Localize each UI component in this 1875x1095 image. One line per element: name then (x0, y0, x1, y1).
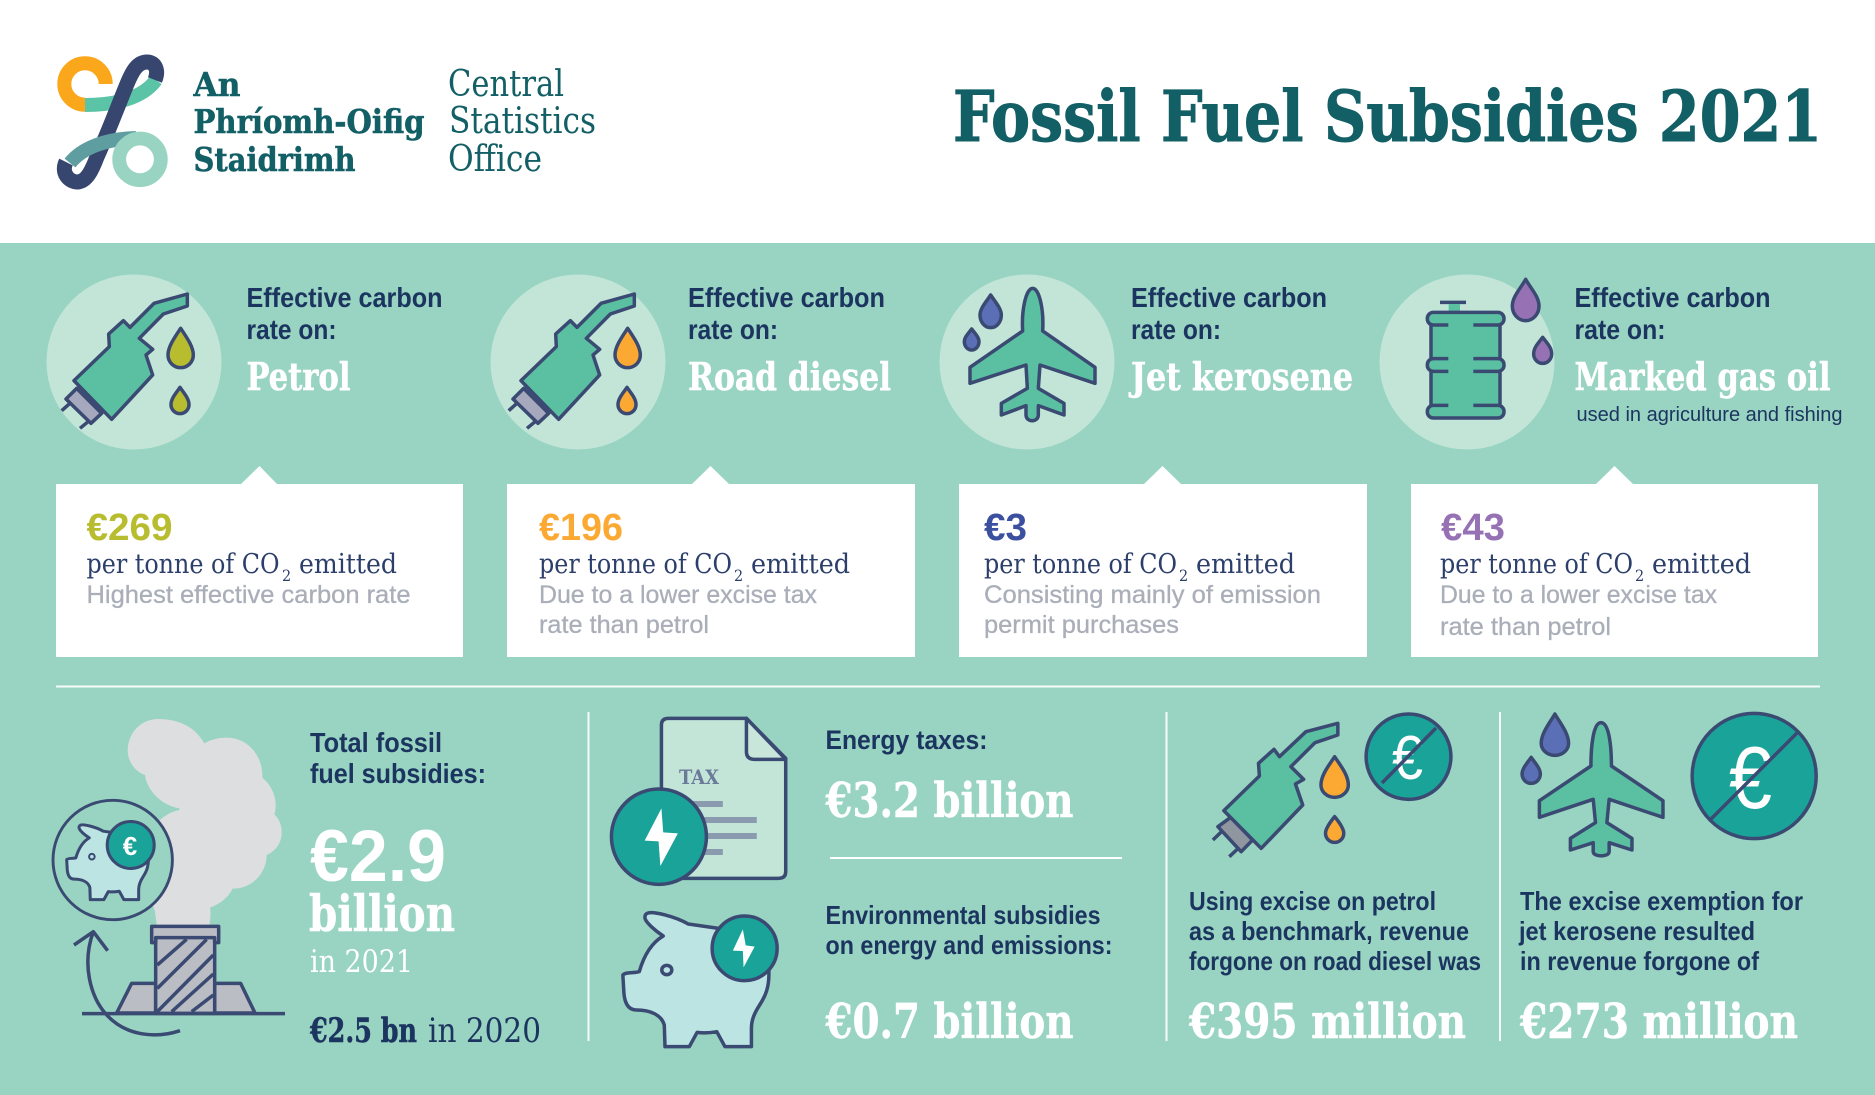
panel: energy taxes and environmental subsidies (611, 718, 1122, 1050)
label: total subsidies (310, 727, 486, 789)
callout: jet kerosene rate: permit purchases (984, 611, 1179, 639)
icon: crossed euro (1382, 724, 1436, 793)
text: jet kerosene revenue: jet kerosene resulted (1518, 916, 1755, 946)
background band (0, 243, 1875, 1095)
text: road diesel revenue: Using excise on petrol (1189, 886, 1436, 916)
callout: jet kerosene rate: Consisting mainly of emission (984, 581, 1321, 609)
icon: nozzle with drops (1213, 714, 1451, 857)
heading: petrol: Effective carbon (246, 282, 442, 313)
value: 2.9 billion: €2.9 (310, 816, 446, 897)
callout: marked gas oil rate: per tonne of CO (1440, 549, 1633, 580)
heading: petrol (246, 282, 442, 399)
callout: petrol rate: emitted (299, 549, 397, 580)
text: jet kerosene revenue: in revenue forgone of (1520, 946, 1759, 976)
icon: diesel nozzle (490, 274, 666, 450)
icon: smoke cloud (128, 719, 282, 927)
heading: road diesel: Effective carbon (688, 282, 885, 313)
text: jet kerosene revenue: €273 million (1519, 994, 1798, 1050)
panel: petrol (46, 274, 463, 657)
heading: petrol: rate on: (246, 314, 336, 345)
callout: road diesel rate: €196 (539, 507, 623, 549)
panel: jet kerosene (940, 274, 1367, 657)
tax label: TAX (679, 765, 719, 789)
callout: road diesel rate: Due to a lower excise tax (539, 581, 817, 609)
icon: tax document (611, 718, 786, 884)
icon: plane with drops (1522, 713, 1816, 856)
value: 2.9 billion (309, 816, 455, 980)
comparison: 2020: €2.5 bn (309, 1011, 417, 1051)
logo English name: Central (448, 64, 564, 105)
text: road diesel revenue: as a benchmark, revenue (1189, 916, 1469, 946)
logo Irish name (192, 65, 425, 179)
comparison: 2020 (309, 1011, 541, 1051)
heading: marked gas oil: Effective carbon (1574, 282, 1770, 313)
heading: petrol: Petrol (246, 354, 351, 399)
icon: crossed euro (1711, 728, 1797, 827)
callout: jet kerosene rate: €3 (984, 507, 1027, 549)
logo Irish name: Staidrimh (194, 140, 356, 179)
icon: petrol nozzle (46, 274, 222, 450)
arrow (74, 932, 180, 1035)
panel: road diesel (490, 274, 915, 657)
text: jet kerosene revenue (1518, 886, 1803, 1050)
heading: jet kerosene: Effective carbon (1131, 282, 1327, 313)
callout: marked gas oil rate: rate than petrol (1440, 613, 1611, 641)
logo: Central Statistics Office (64, 62, 596, 182)
callout: road diesel rate: emitted (751, 549, 850, 580)
logo Irish name: An (192, 65, 240, 104)
text: energy taxes: €3.2 billion (825, 773, 1074, 829)
callout: jet kerosene rate (959, 466, 1367, 657)
callout: jet kerosene rate: per tonne of CO (984, 549, 1177, 580)
icon: piggy bank in circle: € (123, 831, 137, 861)
text: environmental subsidies: on energy and emissions: (826, 930, 1112, 960)
text: energy taxes (825, 725, 1074, 829)
label: total subsidies: Total fossil (310, 727, 442, 758)
logo Irish name: Phríomh-Oifig (194, 102, 425, 141)
icon: piggy bank with energy coin (623, 913, 777, 1047)
icon: barrel (1380, 274, 1554, 450)
icon: crossed euro: € (1392, 724, 1423, 793)
callout: marked gas oil rate (1411, 466, 1818, 657)
callout: jet kerosene rate: emitted (1196, 549, 1295, 580)
icon: chimney (82, 926, 285, 1014)
callout: petrol rate: €269 (86, 507, 172, 549)
callout: petrol rate (56, 466, 463, 657)
callout: road diesel rate: per tonne of CO (539, 549, 732, 580)
text: environmental subsidies (825, 900, 1112, 1050)
callout: road diesel rate: rate than petrol (539, 611, 709, 639)
callout: marked gas oil rate: €43 (1441, 507, 1505, 549)
heading: road diesel: Road diesel (688, 354, 891, 399)
panel: marked gas oil (1380, 274, 1842, 657)
logo English name: Statistics (449, 101, 596, 142)
panel: road diesel revenue forgone (1188, 714, 1481, 1050)
icon: piggy bank in circle (53, 800, 172, 920)
callout: marked gas oil rate: 2 (1635, 566, 1644, 585)
value: 2.9 billion: billion (309, 884, 455, 943)
callout: road diesel rate: 2 (734, 566, 743, 585)
callout: marked gas oil rate: emitted (1652, 549, 1751, 580)
text: road diesel revenue (1188, 886, 1481, 1050)
logo English name: Office (448, 139, 542, 180)
callout: road diesel rate (507, 466, 915, 657)
heading: marked gas oil: used in agriculture and fishing (1576, 404, 1842, 426)
title: Fossil Fuel Subsidies 2021 (953, 75, 1822, 158)
callout: jet kerosene rate: 2 (1179, 566, 1188, 585)
panel: jet kerosene revenue forgone (1518, 713, 1816, 1050)
text: energy taxes: Energy taxes: (826, 725, 988, 755)
icon: crossed euro: € (1729, 728, 1772, 827)
callout: petrol rate: per tonne of CO (86, 549, 280, 580)
callout: petrol rate: 2 (282, 566, 291, 585)
comparison: 2020: in 2020 (428, 1011, 541, 1051)
text: jet kerosene revenue: The excise exemption for (1520, 886, 1803, 916)
heading: jet kerosene: rate on: (1131, 314, 1221, 345)
logo mark (64, 62, 161, 182)
heading: road diesel (688, 282, 891, 399)
text: environmental subsidies: Environmental subsidies (826, 900, 1100, 930)
text: environmental subsidies: €0.7 billion (825, 994, 1074, 1050)
heading: marked gas oil: Marked gas oil (1574, 354, 1830, 399)
logo English name (448, 64, 596, 180)
callout: marked gas oil rate: Due to a lower excise tax (1440, 581, 1717, 609)
panel: total fossil fuel subsidies (53, 719, 541, 1051)
text: road diesel revenue: forgone on road diesel was (1189, 946, 1481, 976)
heading: jet kerosene: Jet kerosene (1128, 354, 1353, 399)
label: total subsidies: fuel subsidies: (310, 758, 486, 789)
icon: plane (940, 274, 1114, 450)
value: 2.9 billion: in 2021 (310, 944, 413, 980)
heading: marked gas oil (1574, 282, 1842, 426)
text: road diesel revenue: €395 million (1188, 994, 1466, 1050)
heading: marked gas oil: rate on: (1574, 314, 1666, 345)
heading: jet kerosene (1128, 282, 1353, 399)
heading: road diesel: rate on: (688, 314, 778, 345)
callout: petrol rate: Highest effective carbon rate (86, 581, 410, 609)
